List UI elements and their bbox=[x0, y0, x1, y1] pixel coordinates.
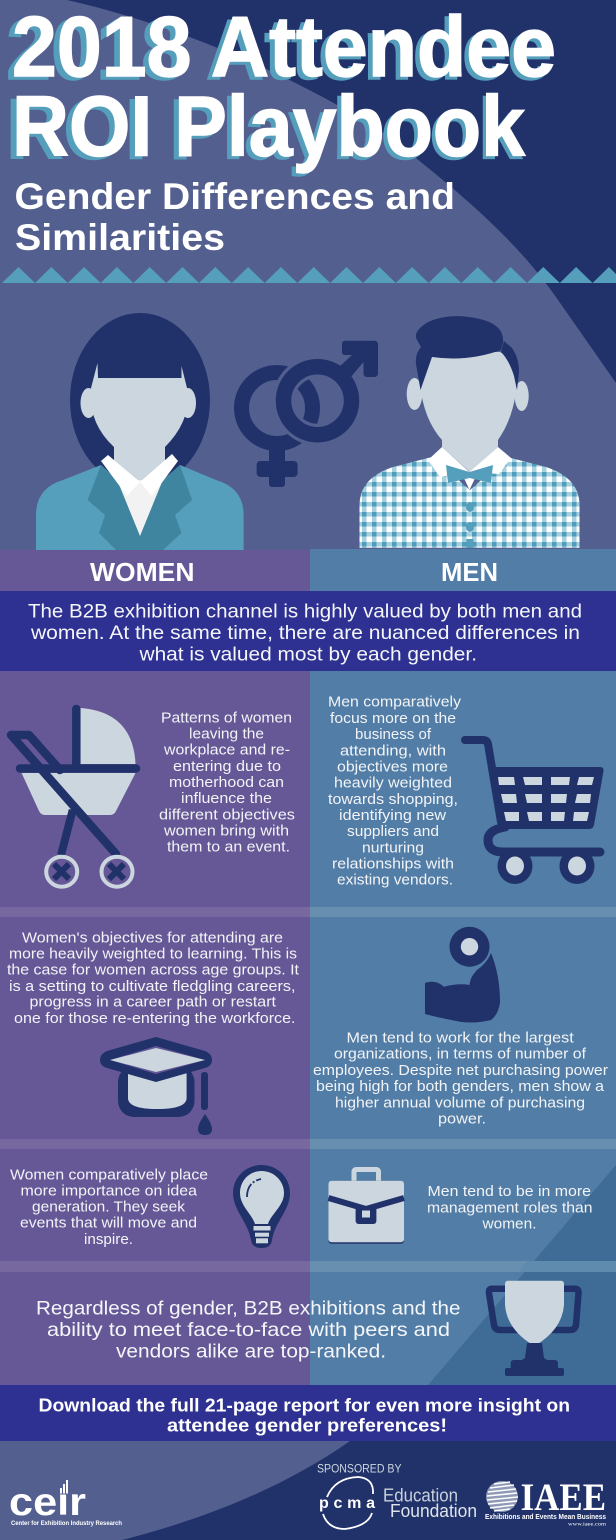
panel backgrounds: women column bbox=[0, 671, 310, 1385]
text: men shopping: attending, with bbox=[340, 742, 446, 759]
intro band: The B2B exhibition channel is highly valued by both men and bbox=[28, 600, 582, 622]
text: men organizations: Men tend to work for the largest bbox=[346, 1030, 575, 1047]
text: shared conclusion: vendors alike are top-ranked. bbox=[116, 1340, 386, 1362]
text: men organizations: being high for both genders, men show a bbox=[316, 1078, 605, 1095]
text: men shopping: suppliers and bbox=[347, 823, 439, 840]
text: men organizations: higher annual volume of purchasing bbox=[335, 1094, 585, 1111]
text: women motherhood: entering due to bbox=[173, 758, 281, 775]
text: women motherhood: workplace and re- bbox=[163, 742, 290, 759]
logo: ceir: ceir bbox=[9, 1481, 86, 1524]
logo: IAEE: IAEE bbox=[521, 1476, 606, 1519]
text: men shopping bbox=[328, 694, 462, 889]
icon: light bulb bbox=[233, 1165, 290, 1248]
text: women learning: progress in a career path or restart bbox=[30, 994, 277, 1011]
text: women motherhood: motherhood can bbox=[169, 774, 284, 791]
text: men shopping: Men comparatively bbox=[328, 694, 462, 711]
icon: briefcase bbox=[328, 1170, 404, 1244]
text: men shopping: identifying new bbox=[339, 807, 446, 824]
text: shared conclusion bbox=[36, 1297, 460, 1362]
column header: men bbox=[310, 549, 616, 591]
text: men shopping: focus more on the bbox=[330, 710, 456, 727]
column header: men: MEN bbox=[441, 557, 498, 587]
title: ROI Playbook bbox=[12, 80, 526, 175]
text: women ideas: events that will move and bbox=[20, 1215, 197, 1232]
logo: pcma education foundation: pcma bbox=[319, 1495, 375, 1512]
text: women learning: more heavily weighted to learning. This is bbox=[9, 945, 297, 962]
text: men organizations: power. bbox=[438, 1110, 486, 1127]
text: women ideas: Women comparatively place bbox=[10, 1166, 208, 1183]
text: men management: Men tend to be in more bbox=[428, 1183, 591, 1200]
icon: stroller bbox=[11, 708, 136, 887]
text: men shopping: towards shopping, bbox=[328, 791, 458, 808]
logo: pcma education foundation: Foundation bbox=[390, 1501, 477, 1521]
panel backgrounds: men column bbox=[310, 671, 616, 1385]
logo: IAEE: www.iaee.com bbox=[568, 1523, 606, 1528]
text: women learning: Women's objectives for attending are bbox=[22, 929, 283, 946]
text: women motherhood: Patterns of women bbox=[161, 709, 292, 726]
logo: ceir: Center for Exhibition Industry Research bbox=[11, 1521, 122, 1527]
text: women motherhood: leaving the bbox=[189, 725, 264, 742]
icon: graduation cap bbox=[100, 1037, 212, 1135]
text: women motherhood: women bring with bbox=[163, 823, 289, 840]
text: men organizations bbox=[313, 1030, 608, 1127]
text: shared conclusion: Regardless of gender, B2B exhibitions and the bbox=[36, 1297, 460, 1319]
title bbox=[6, 0, 556, 178]
icon: trophy bbox=[489, 1281, 579, 1376]
text: women ideas: inspire. bbox=[84, 1231, 133, 1248]
logo: IAEE bbox=[485, 1476, 606, 1528]
woman figure bbox=[36, 313, 244, 550]
logo: pcma education foundation: Education bbox=[383, 1486, 458, 1506]
subtitle: Gender Differences and bbox=[14, 176, 455, 217]
logo: IAEE: Exhibitions and Events Mean Business bbox=[485, 1514, 606, 1521]
column header: women: WOMEN bbox=[90, 557, 194, 587]
text: women motherhood: influence the bbox=[181, 790, 272, 807]
download band: attendee gender preferences! bbox=[167, 1415, 447, 1436]
subtitle: Similarities bbox=[15, 217, 225, 258]
text: men shopping: objectives more bbox=[337, 759, 448, 776]
intro band: what is valued most by each gender. bbox=[138, 644, 477, 666]
background arc: bottom right bbox=[122, 1441, 616, 1540]
logo: ceir bbox=[9, 1480, 122, 1527]
man figure bbox=[360, 316, 580, 548]
triangle divider bbox=[2, 267, 616, 283]
text: men management: women. bbox=[481, 1215, 536, 1232]
text: men organizations: organizations, in terms of number of bbox=[334, 1046, 587, 1063]
text: men shopping: heavily weighted bbox=[334, 775, 452, 792]
text: men shopping: business of bbox=[355, 726, 432, 743]
text: men shopping: existing vendors. bbox=[337, 872, 453, 889]
intro band: women. At the same time, there are nuanced differences in bbox=[30, 622, 580, 644]
title: 2018 Attendee bbox=[12, 0, 556, 95]
download band bbox=[0, 1385, 616, 1441]
text: women learning: one for those re-entering the workforce. bbox=[14, 1010, 296, 1027]
text: men shopping: relationships with bbox=[332, 855, 454, 872]
text: men management: management roles than bbox=[427, 1199, 592, 1216]
text: women motherhood: different objectives bbox=[159, 806, 295, 823]
title: 2018 Attendee bbox=[6, 3, 552, 98]
text: men organizations: employees. Despite net purchasing power bbox=[313, 1062, 608, 1079]
icon: shopping cart bbox=[465, 740, 604, 884]
text: women ideas: generation. They seek bbox=[32, 1199, 186, 1216]
column header: women bbox=[0, 550, 310, 591]
text: women learning bbox=[7, 929, 300, 1027]
text: women ideas: more importance on idea bbox=[20, 1182, 198, 1199]
text: women learning: is a setting to cultivate fledgling careers, bbox=[9, 978, 296, 995]
text: women motherhood: them to an event. bbox=[167, 839, 290, 856]
text: shared conclusion: ability to meet face-to-face with peers and bbox=[47, 1319, 450, 1341]
text: women motherhood bbox=[159, 709, 295, 856]
icon: gender symbols bbox=[242, 341, 378, 487]
text: men management bbox=[427, 1183, 592, 1232]
text: women ideas bbox=[10, 1166, 208, 1248]
icon: flexed arm with dumbbell bbox=[425, 927, 500, 1023]
intro band bbox=[0, 591, 616, 671]
logo: pcma education foundation bbox=[319, 1477, 477, 1529]
title: ROI Playbook bbox=[6, 83, 523, 178]
subtitle bbox=[14, 176, 455, 258]
background arc: top right bbox=[67, 0, 616, 383]
text: men shopping: nurturing bbox=[362, 839, 424, 856]
text: women learning: the case for women across age groups. It bbox=[7, 962, 300, 979]
sponsored by label: SPONSORED BY bbox=[317, 1461, 402, 1475]
download band: Download the full 21-page report for even more insight on bbox=[38, 1395, 570, 1416]
